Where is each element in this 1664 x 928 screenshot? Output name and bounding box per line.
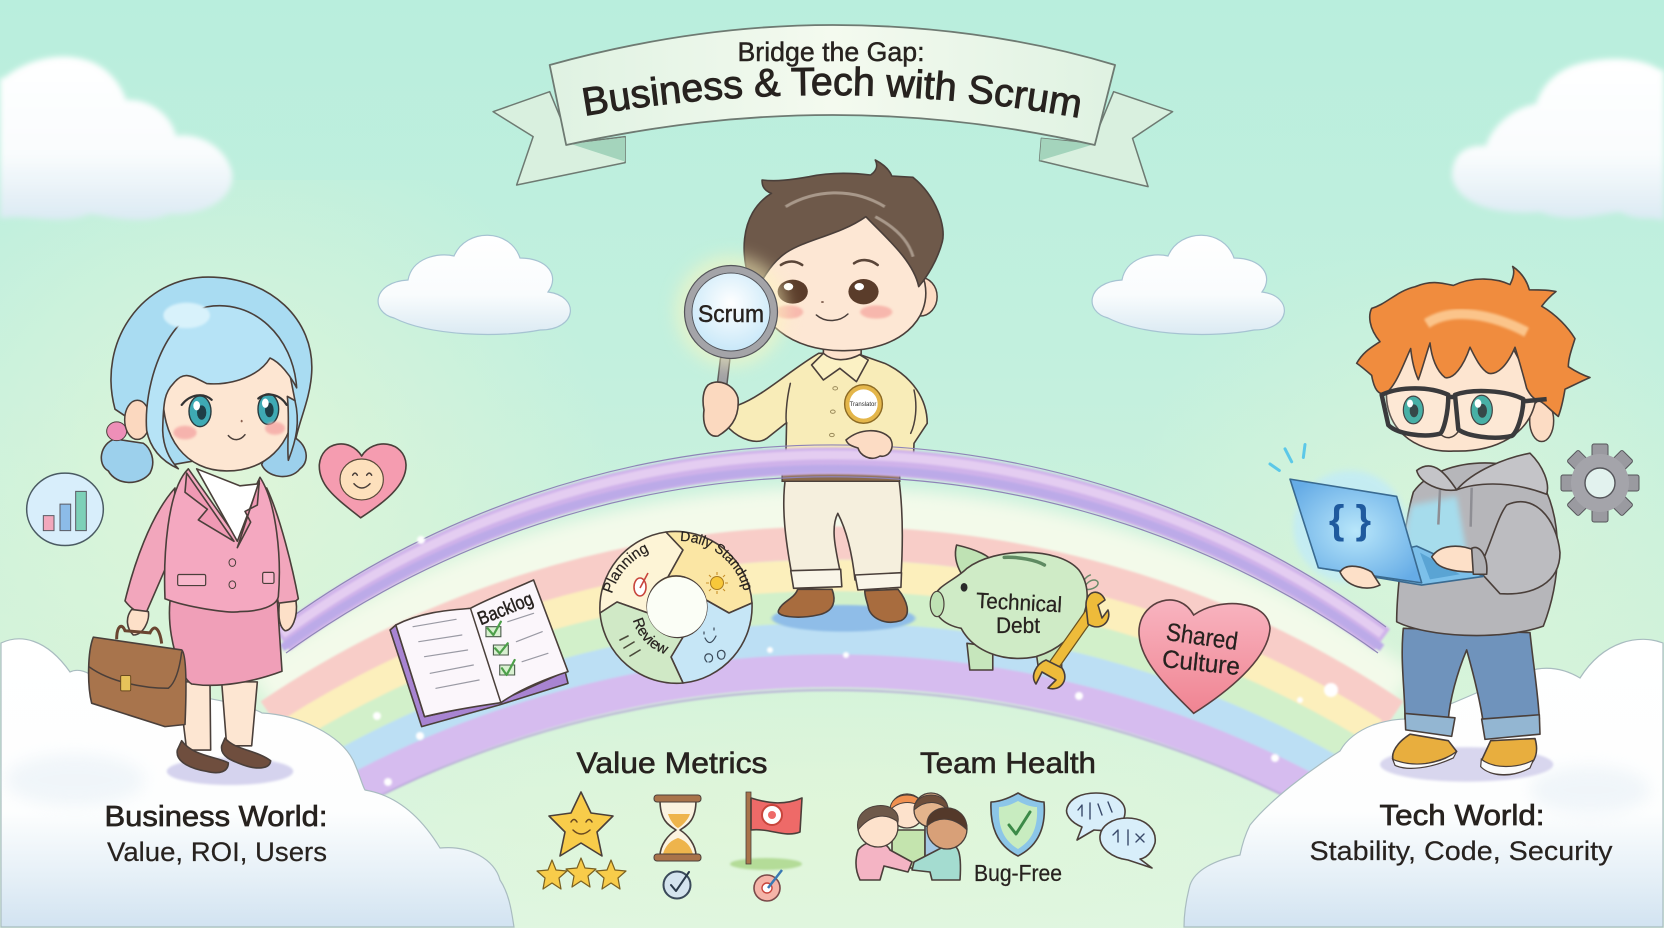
typing hand (1432, 546, 1475, 572)
title main text: Business & Tech with Scrum (582, 66, 1080, 118)
planning segment (600, 532, 683, 613)
daily standup label: Daily Standup (680, 531, 750, 590)
laptop code icon: { } (1329, 498, 1371, 542)
badge text: Translator (850, 402, 876, 408)
icon: heart with smile (319, 444, 406, 518)
character torso and head (727, 160, 943, 467)
daily standup segment (666, 531, 752, 613)
icon: shield with check (991, 793, 1044, 856)
icon: speech bubbles (1067, 793, 1155, 868)
briefcase (89, 626, 186, 727)
ear and face (1386, 336, 1554, 451)
sneakers (1393, 734, 1537, 775)
eyes (1403, 395, 1492, 438)
character hand on arch (846, 431, 892, 458)
character hand on magnifier (703, 382, 738, 436)
review label: Review (633, 617, 669, 654)
icon: magnifying glass (675, 255, 787, 428)
icon: bar chart bubble (27, 473, 103, 546)
wheel text path review (633, 620, 668, 655)
panel: scrum master character (675, 160, 943, 632)
heart label line one: Shared (1164, 618, 1240, 656)
panel: backlog book (390, 580, 568, 727)
panel: tech persona (1270, 266, 1639, 866)
laptop glow ticks (1270, 445, 1305, 470)
icon: smiley scribble (704, 628, 725, 662)
laptop (1290, 470, 1483, 585)
cloud: bottom right (1184, 639, 1663, 927)
hoodie (1397, 453, 1560, 636)
lower rainbow (270, 543, 1394, 803)
review segment (600, 602, 683, 683)
label: tech world heading: Tech World: (1380, 800, 1544, 832)
panel: value metrics (537, 747, 802, 901)
icon: flag with target (730, 792, 802, 870)
planning label: Planning (602, 544, 649, 593)
icon: team group (856, 793, 967, 880)
piggy label line one: Technical (975, 588, 1063, 617)
heart label line two: Culture (1161, 645, 1241, 681)
bug-free label: Bug-Free (974, 860, 1062, 886)
banner fold left (571, 137, 625, 162)
title banner (493, 25, 1173, 187)
shoes (177, 738, 271, 773)
icon: small target (634, 573, 648, 596)
glow between rainbow arcs (270, 522, 1394, 700)
team health heading: Team Health (920, 747, 1096, 780)
sleeve cuff (1472, 547, 1487, 574)
piggy label line two: Debt (996, 613, 1040, 638)
label: tech world values: Stability, Code, Security (1310, 836, 1613, 866)
legs (178, 682, 257, 750)
magnifier label: Scrum (698, 301, 764, 328)
cloud: middle left (378, 235, 570, 334)
icon: wrench (1034, 592, 1109, 689)
wheel text path planning (612, 547, 664, 594)
icon: small bullseye (754, 870, 782, 901)
character legs (772, 470, 915, 632)
icon: sun (706, 572, 728, 594)
panel: technical debt piggy bank (930, 545, 1109, 689)
value metrics heading: Value Metrics (576, 747, 768, 780)
backlog label: Backlog (475, 589, 536, 630)
rainbow sparkles (373, 536, 1338, 786)
icon: hourglass (654, 795, 701, 861)
panel: business persona (27, 277, 406, 867)
upper rainbow arch (278, 445, 1386, 653)
blue segment (671, 600, 752, 683)
icon: gear (1561, 444, 1639, 522)
jacket torso (165, 469, 279, 612)
glasses (1382, 388, 1547, 438)
character: business girl (89, 277, 312, 785)
wheel text path daily (680, 541, 746, 620)
panel: team health (856, 747, 1155, 886)
label: business world values: Value, ROI, Users (107, 837, 327, 867)
cloud: top right (1452, 59, 1664, 220)
banner right tail (1040, 92, 1173, 187)
title line one: Bridge the Gap: (738, 37, 924, 67)
face (146, 303, 297, 471)
jeans (1402, 628, 1540, 739)
holding hand (1340, 566, 1380, 588)
icon: small check target (664, 872, 690, 898)
icon: smiling star (549, 792, 613, 856)
label: business world heading: Business World: (104, 801, 328, 833)
icon: review scribble (620, 636, 640, 656)
character: tech boy (1270, 266, 1590, 782)
cloud: bottom left (1, 639, 514, 927)
skirt (169, 601, 282, 685)
cloud: middle right (1092, 235, 1284, 334)
arms (125, 488, 298, 635)
banner fold right (1040, 138, 1095, 161)
wheel hub (647, 577, 707, 637)
icon: three small stars (537, 858, 626, 889)
cloud shading (5, 754, 1650, 814)
panel: scrum wheel (599, 530, 753, 684)
cloud: top left (0, 57, 232, 220)
panel: shared culture heart (1139, 600, 1270, 713)
banner left tail (493, 92, 625, 185)
title text path (578, 95, 1086, 119)
banner main ribbon (550, 25, 1115, 145)
orange hair (1357, 266, 1590, 416)
